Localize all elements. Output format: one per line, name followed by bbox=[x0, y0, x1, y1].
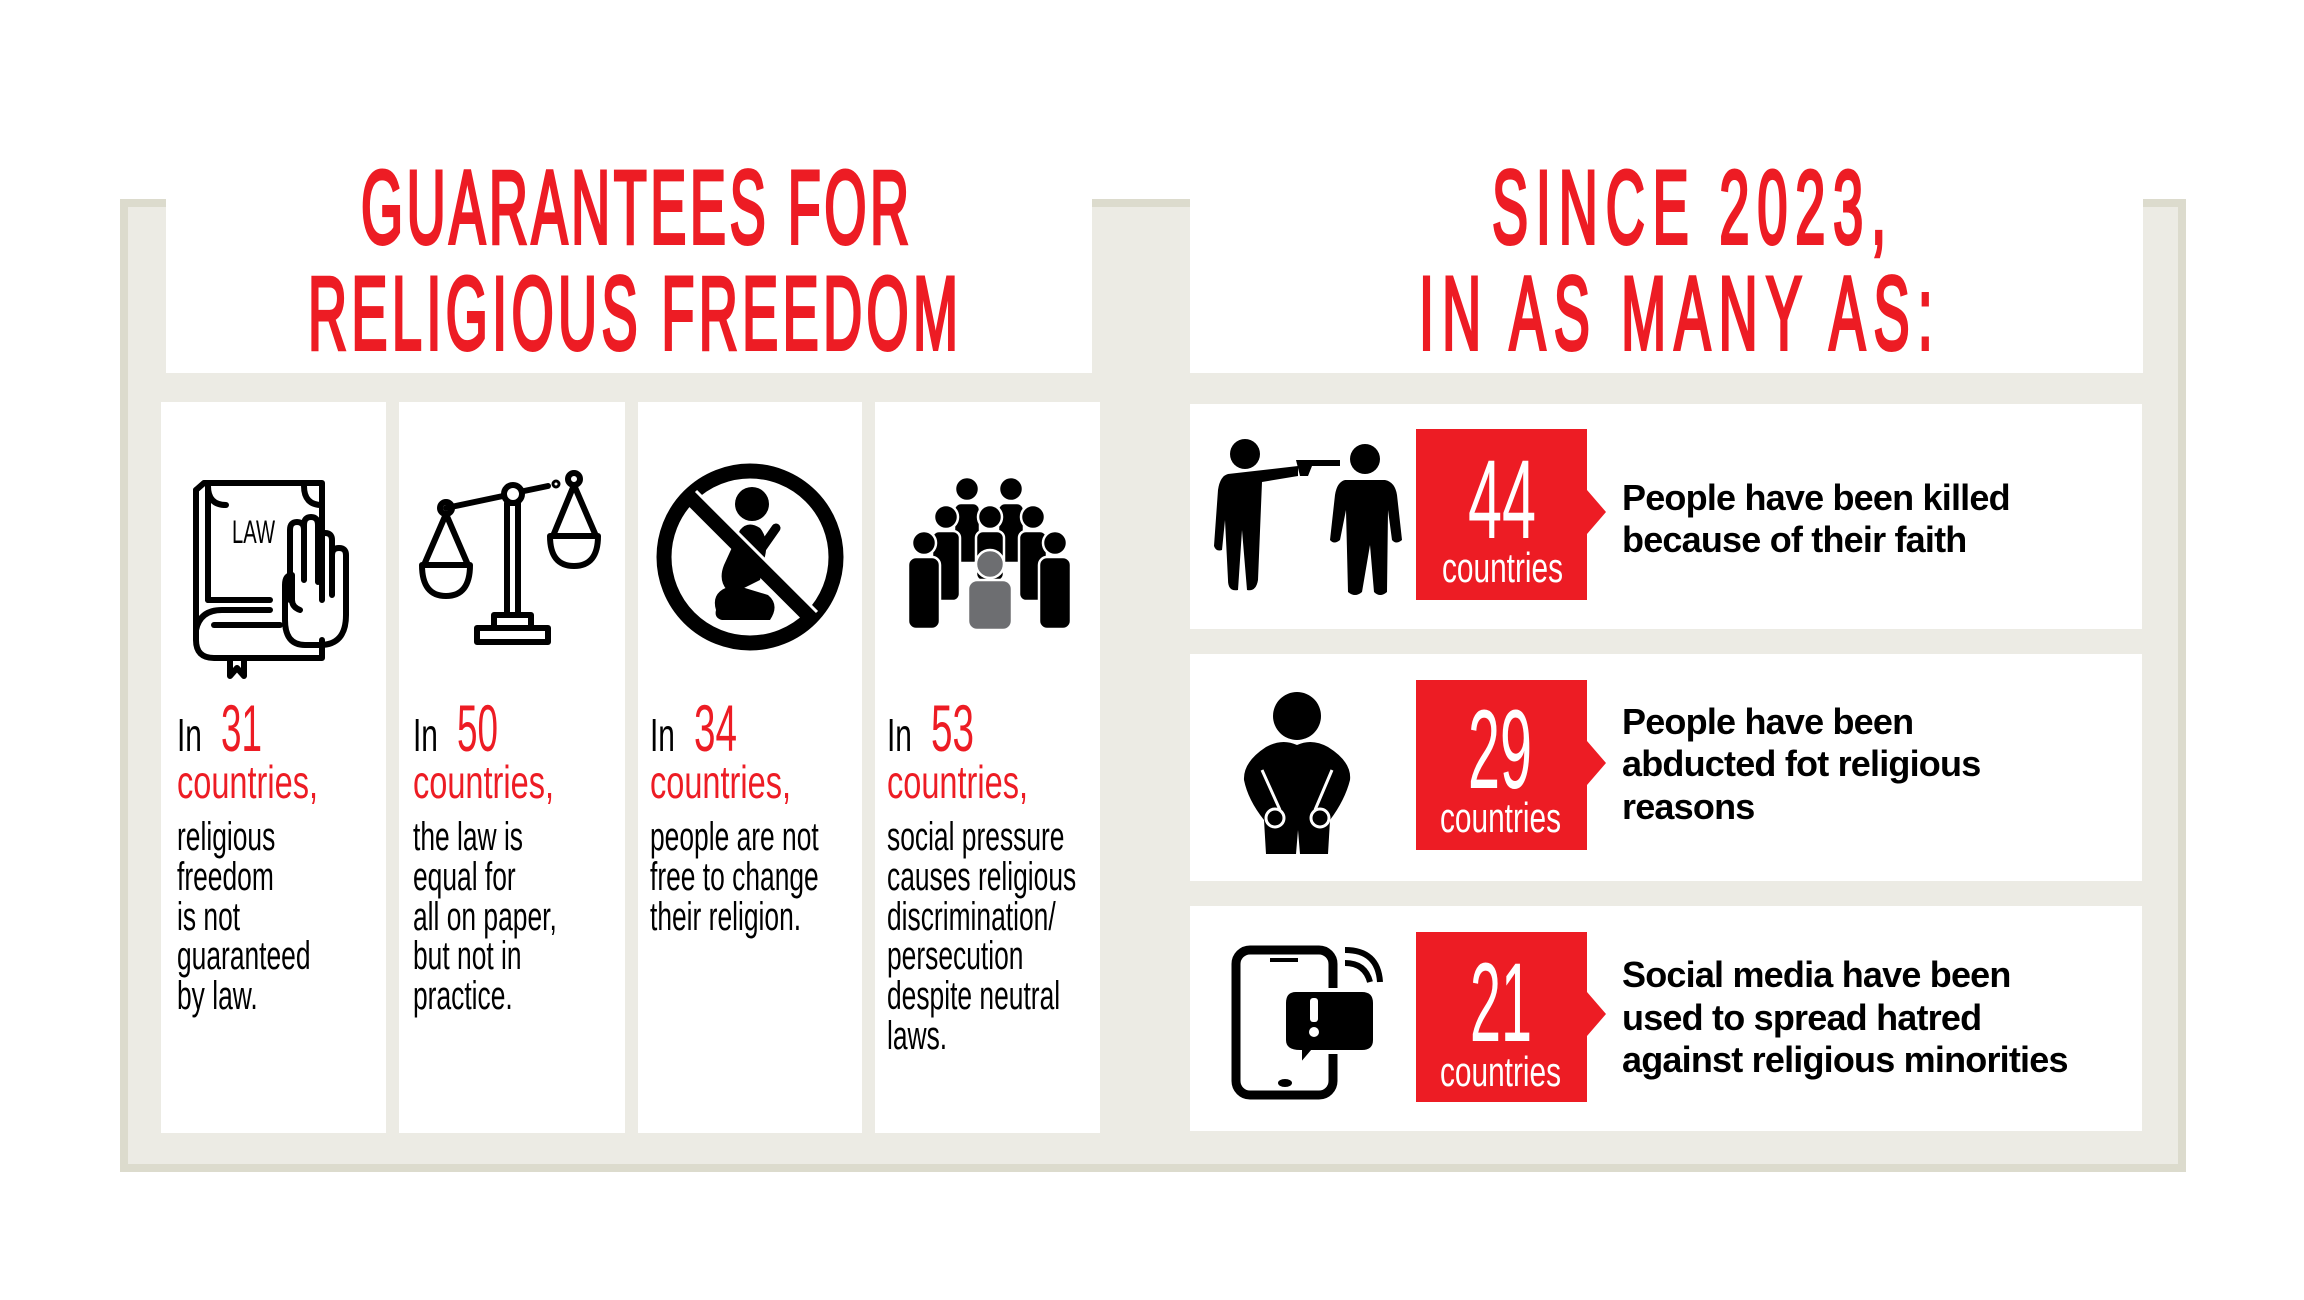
text: 31 countries bbox=[177, 691, 318, 1018]
text: 31 countries: guaranteed bbox=[177, 934, 311, 978]
text: 34 countries: people are not bbox=[650, 815, 819, 859]
icon: prohibited prayer bbox=[664, 471, 836, 643]
text: 53 countries: countries, bbox=[887, 756, 1028, 808]
text: 50 countries: equal for bbox=[413, 855, 516, 899]
panel: card 1 law bbox=[161, 402, 386, 1133]
icon: law book with hand bbox=[196, 483, 346, 676]
callout: 21 countries: countries bbox=[1440, 1048, 1561, 1095]
title: since 2023 bbox=[1419, 149, 1933, 372]
text: abducted: reasons bbox=[1622, 786, 1754, 827]
text: 31 countries: countries, bbox=[177, 756, 318, 808]
text: social media: against religious minorities bbox=[1622, 1039, 2068, 1080]
text: 31 countries: freedom bbox=[177, 855, 274, 899]
text: 50 countries: but not in bbox=[413, 934, 522, 978]
icon: crowd bbox=[908, 477, 1071, 630]
title: guarantees: RELIGIOUS FREEDOM bbox=[308, 255, 958, 372]
text: abducted: abducted fot religious bbox=[1622, 743, 1980, 784]
text: 53 countries: social pressure bbox=[887, 815, 1064, 859]
callout: 44 countries bbox=[1416, 429, 1606, 600]
text: 50 countries bbox=[413, 691, 557, 1018]
title box: right bbox=[1190, 149, 2143, 373]
text: 50 countries: 50 bbox=[457, 691, 498, 765]
icon: handcuffed person bbox=[1244, 692, 1350, 854]
callout: 44 countries: 44 bbox=[1468, 437, 1536, 562]
text: 34 countries: their religion. bbox=[650, 895, 801, 939]
text: killed: People have been killed bbox=[1622, 477, 2010, 518]
text: social media: used to spread hatred bbox=[1622, 997, 1981, 1038]
title: since 2023: IN AS MANY AS: bbox=[1419, 255, 1933, 372]
text: 53 countries: In bbox=[887, 711, 912, 762]
panel: row killed bbox=[1190, 404, 2142, 629]
text: 31 countries: is not bbox=[177, 895, 241, 939]
panel: card 4 social pressure bbox=[875, 402, 1100, 1133]
text: 50 countries: the law is bbox=[413, 815, 523, 859]
title: since 2023: SINCE 2023, bbox=[1492, 149, 1886, 266]
text: 34 countries: countries, bbox=[650, 756, 791, 808]
panel: row abducted bbox=[1190, 654, 2142, 881]
text: killed bbox=[1622, 477, 2010, 560]
text: 34 countries: 34 bbox=[694, 691, 737, 765]
text: killed: because of their faith bbox=[1622, 519, 1966, 560]
text: 31 countries: by law. bbox=[177, 974, 258, 1018]
text: 31 countries: religious bbox=[177, 815, 275, 859]
text: 53 countries: despite neutral bbox=[887, 974, 1060, 1018]
text: 31 countries: In bbox=[177, 711, 202, 762]
title box: left bbox=[166, 149, 1092, 373]
callout: 44 countries: countries bbox=[1442, 544, 1563, 591]
text: 34 countries: In bbox=[650, 711, 675, 762]
icon: unbalanced scale bbox=[422, 473, 598, 642]
icon: gunman bbox=[1214, 439, 1402, 595]
panel: card 3 no praying bbox=[638, 402, 862, 1133]
panel: row social media bbox=[1190, 906, 2142, 1131]
panel: card 1 law: LAW bbox=[232, 514, 276, 550]
callout: 21 countries: 21 bbox=[1470, 940, 1532, 1065]
text: 53 countries: discrimination/ bbox=[887, 895, 1056, 939]
text: 53 countries: persecution bbox=[887, 934, 1023, 978]
text: 50 countries: countries, bbox=[413, 756, 554, 808]
title: guarantees bbox=[308, 149, 958, 372]
text: 50 countries: all on paper, bbox=[413, 895, 557, 939]
text: 53 countries: causes religious bbox=[887, 855, 1076, 899]
title: guarantees: GUARANTEES FOR bbox=[361, 149, 909, 266]
callout: 29 countries: 29 bbox=[1468, 687, 1532, 812]
frame bbox=[124, 203, 2182, 1168]
icon: phone with alert bbox=[1236, 950, 1380, 1095]
text: 53 countries: 53 bbox=[931, 691, 974, 765]
text: social media bbox=[1622, 954, 2068, 1080]
text: 34 countries: free to change bbox=[650, 855, 819, 899]
callout: 29 countries bbox=[1416, 680, 1606, 850]
text: 50 countries: In bbox=[413, 711, 438, 762]
text: 53 countries: laws. bbox=[887, 1014, 947, 1058]
text: social media: Social media have been bbox=[1622, 954, 2011, 995]
text: 53 countries bbox=[887, 691, 1076, 1058]
text: 50 countries: practice. bbox=[413, 974, 513, 1018]
text: 34 countries bbox=[650, 691, 819, 939]
text: abducted: People have been bbox=[1622, 701, 1913, 742]
text: 31 countries: 31 bbox=[221, 691, 262, 765]
callout: 29 countries: countries bbox=[1440, 794, 1561, 841]
callout: 21 countries bbox=[1416, 932, 1606, 1102]
panel: card 2 scale bbox=[399, 402, 625, 1133]
text: abducted bbox=[1622, 701, 1980, 827]
